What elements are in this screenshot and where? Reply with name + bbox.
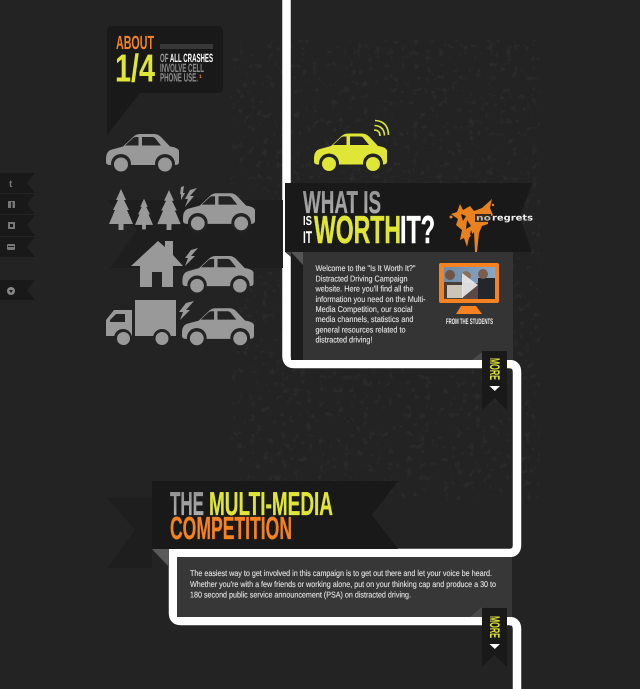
icon: google ribbon [0,215,35,236]
icon: trees crash [109,186,255,233]
intro text: media channels, statistics and [316,314,414,324]
panel: side share ribbons [0,173,35,300]
icon: facebook ribbon [0,194,35,214]
intro text: website. Here you'll find all the [315,284,414,294]
callout text [160,51,213,84]
icon: yellow connected car [314,120,388,174]
video monitor [439,263,499,326]
icon: gray car [106,134,179,174]
callout fraction: 1/4 [115,48,155,90]
intro text [315,263,426,345]
competition text: The easiest way to get involved in this campaign is to get out there and let your voice be heard. [190,568,492,578]
competition text [190,568,496,600]
heading: worth it: WORTH [314,209,401,252]
heading banner: what is it worth it [285,183,533,257]
icon: twitter ribbon: t [9,179,13,190]
heading small: is it [303,213,312,247]
icon: download ribbon [0,280,35,300]
ribbon: more 2 [482,608,507,667]
competition text: Whether you're with a few friends or working alone, put on your thinking cap and produce a 30 to [190,579,496,589]
ribbon label: MORE [487,616,503,638]
icon: house crash [131,241,254,295]
logo: no regrets [450,199,533,252]
banner tail [107,498,152,568]
callout text: PHONE USE. [160,70,198,84]
heading: multi-media: MULTI-MEDIA [209,485,333,522]
heading: competition: COMPETITION [170,510,292,546]
white route line [173,0,517,689]
heading small: is it: IS [303,213,312,228]
ribbon: more 1 [482,351,507,410]
icon: truck crash [106,300,254,348]
icon: signal arcs [374,120,388,136]
icon: mail ribbon [0,237,35,257]
panel: competition [177,557,512,617]
intro text: general resources related to [316,324,406,334]
intro text: information you need on the Multi- [316,294,426,304]
icon: down arrow [490,644,500,649]
icon: down arrow [490,386,500,391]
heading: the: THE [170,485,204,522]
callout heading: ABOUT [116,33,154,54]
callout text: INVOLVE CELL [160,61,204,75]
heading banner: the multi-media competition [107,481,398,568]
intro text: Media Competition, our social [316,304,413,314]
panel: what is it worth [291,252,513,360]
logo: no regrets: no [476,214,492,222]
logo: no regrets: regrets [492,214,533,224]
intro text: Distracted Driving Campaign [316,273,408,283]
heading small: is it: IT [303,228,312,247]
competition text: 180 second public service announcement (PSA) on distracted driving. [190,590,411,600]
callout: about 1/4 of crashes [107,26,223,135]
intro text: distracted driving! [316,335,372,345]
video caption: FROM THE STUDENTS [446,317,493,326]
callout text: OF ALL CRASHES [160,51,213,65]
ribbon label: MORE [487,358,503,380]
band behind crash icons [107,200,283,268]
heading line: what is: WHAT IS [303,184,381,220]
callout text: 1 [199,74,202,80]
heading: it question: IT? [400,209,435,252]
intro text: Welcome to the "Is It Worth It?" [316,263,416,273]
